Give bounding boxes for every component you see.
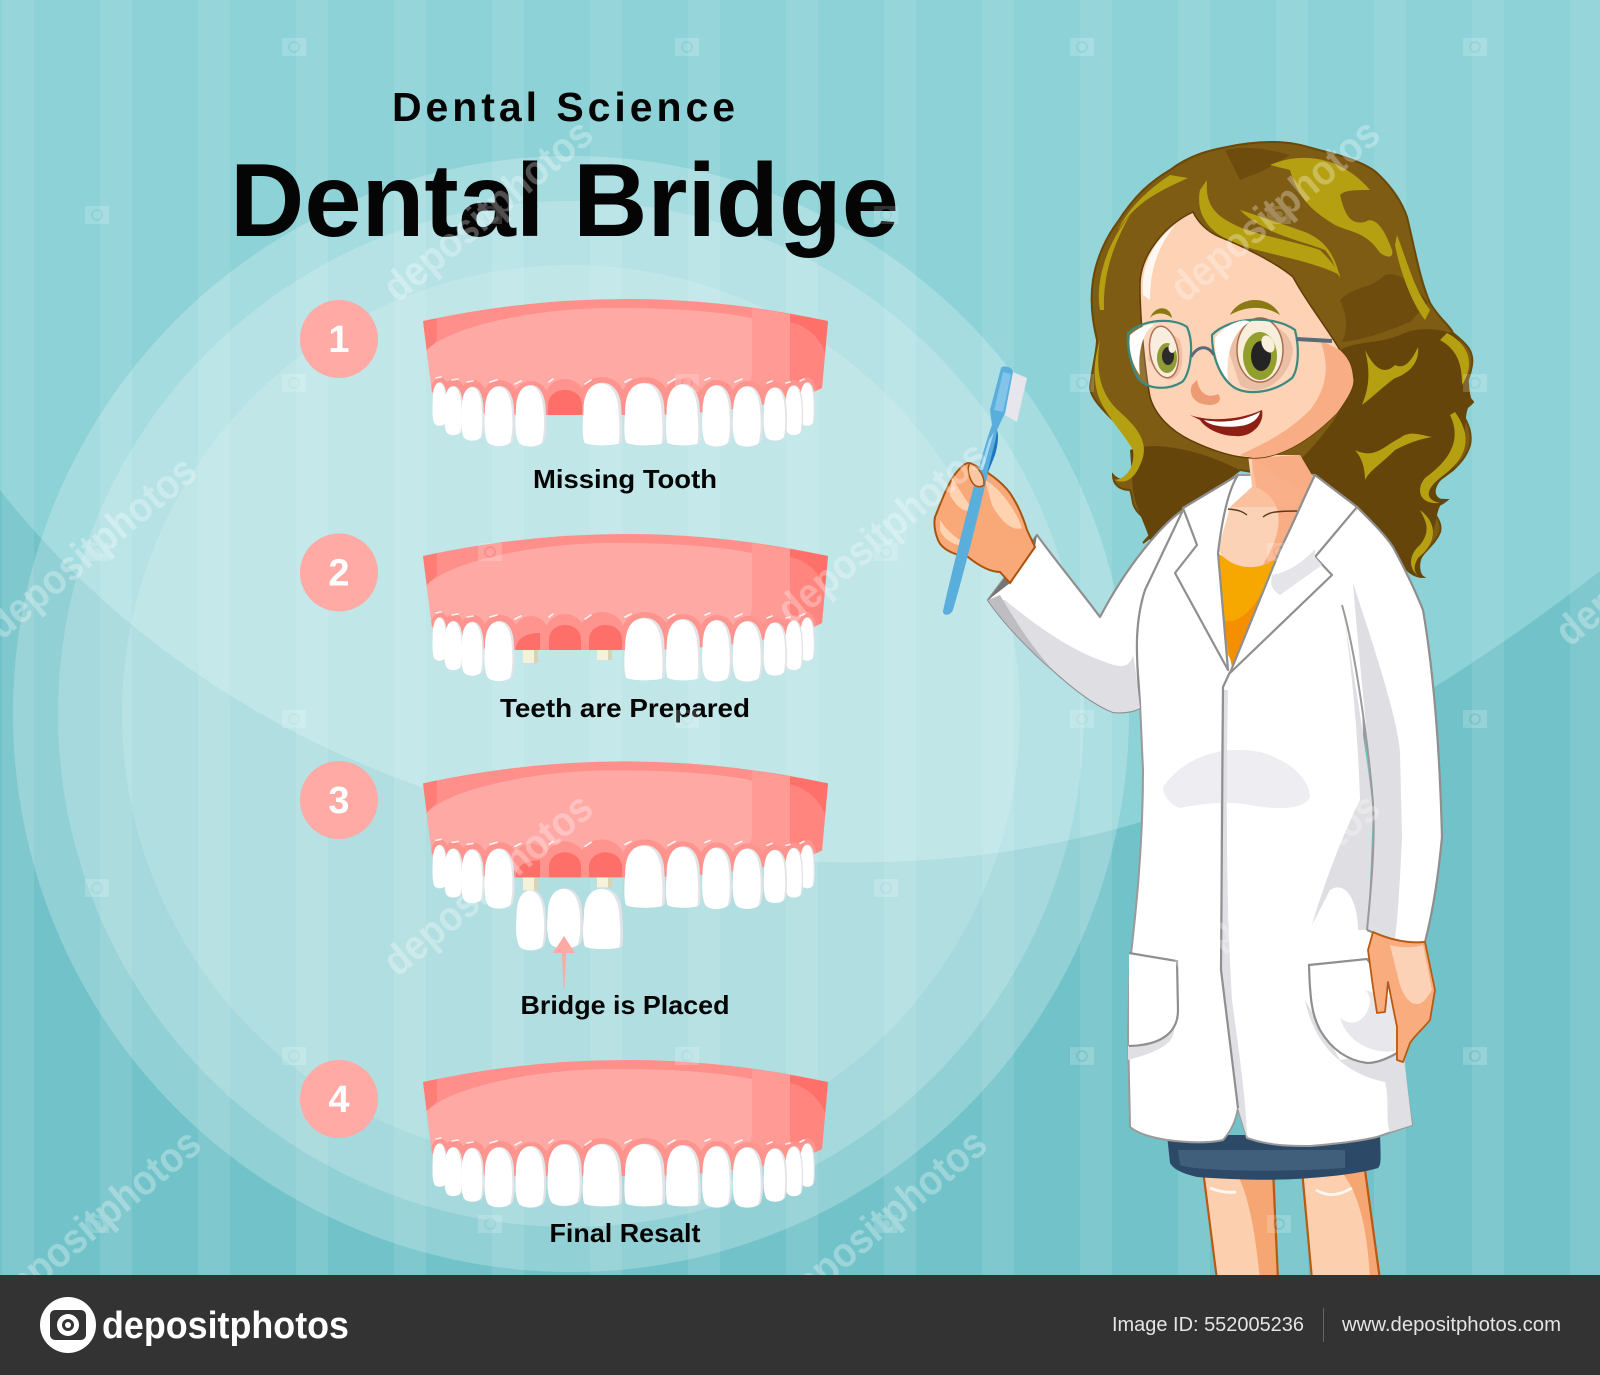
step 1 jaw: missing tooth xyxy=(423,299,828,447)
legs xyxy=(1203,1170,1380,1280)
step 3 number badge xyxy=(300,761,378,839)
eyebrows xyxy=(1150,300,1280,318)
step 4 number badge: 4 xyxy=(328,1079,350,1121)
step 2 number badge: 2 xyxy=(328,552,350,594)
arrow: bridge moves up xyxy=(553,936,575,988)
coat body xyxy=(1128,475,1412,1146)
step 1 number badge: 1 xyxy=(328,319,350,361)
mouth xyxy=(1190,410,1262,436)
step 3 number badge: 3 xyxy=(328,780,350,822)
step 1 caption: Missing Tooth xyxy=(533,464,717,494)
footer logo icon xyxy=(40,1297,96,1353)
step 3 jaw: bridge being placed xyxy=(423,761,828,950)
step 3 panel xyxy=(300,761,828,1020)
thumb xyxy=(968,463,984,487)
lowered hand xyxy=(1368,932,1435,1062)
footer logo wordmark: depositphotos xyxy=(102,1305,349,1347)
heading: Dental Science: Dental Science xyxy=(392,84,735,130)
step 4 jaw: final result xyxy=(423,1060,828,1208)
step 4 caption: Final Resalt xyxy=(550,1218,701,1248)
title: Dental Bridge: Dental Bridge xyxy=(230,143,899,259)
neck shadow and collarbone xyxy=(1228,455,1313,566)
glasses xyxy=(1128,320,1332,392)
collar xyxy=(1175,475,1357,673)
step 1 number badge xyxy=(300,300,378,378)
face xyxy=(1128,212,1353,458)
step 4 panel xyxy=(300,1060,828,1248)
step 1 panel xyxy=(300,299,828,494)
eyes xyxy=(1146,318,1293,390)
watermark text: depositphotos xyxy=(374,783,601,985)
neck xyxy=(1218,455,1313,567)
image id: Image ID: 552005236 xyxy=(1112,1314,1304,1336)
website: www.depositphotos.com xyxy=(1341,1314,1561,1336)
watermark text: depositphotos xyxy=(1161,783,1388,985)
right sleeve xyxy=(1340,507,1442,942)
step 2 caption: Teeth are Prepared xyxy=(500,693,750,723)
nose xyxy=(1191,380,1220,405)
left sleeve xyxy=(988,510,1183,712)
step 2 panel xyxy=(300,534,828,723)
watermark text: depositphotos xyxy=(374,109,601,311)
lowered hand highlight xyxy=(1390,945,1432,1004)
raised hand xyxy=(934,463,1035,583)
footer bar xyxy=(0,1275,1600,1375)
dentist character xyxy=(934,142,1473,1280)
watermark text: depositphotos xyxy=(768,431,995,633)
step 4 number badge xyxy=(300,1060,378,1138)
step 2 number badge xyxy=(300,534,378,612)
hair xyxy=(1090,142,1473,577)
toothbrush xyxy=(943,366,1027,615)
skirt xyxy=(1167,1135,1381,1180)
divider xyxy=(1323,1308,1324,1342)
step 3 caption: Bridge is Placed xyxy=(520,990,730,1020)
watermark text: depositphotos xyxy=(1161,109,1388,311)
step 2 jaw: prepared teeth xyxy=(423,534,828,682)
watermark camera icons xyxy=(85,38,1487,1233)
watermark text: depositphotos xyxy=(768,1119,995,1321)
shirt xyxy=(1219,554,1276,666)
